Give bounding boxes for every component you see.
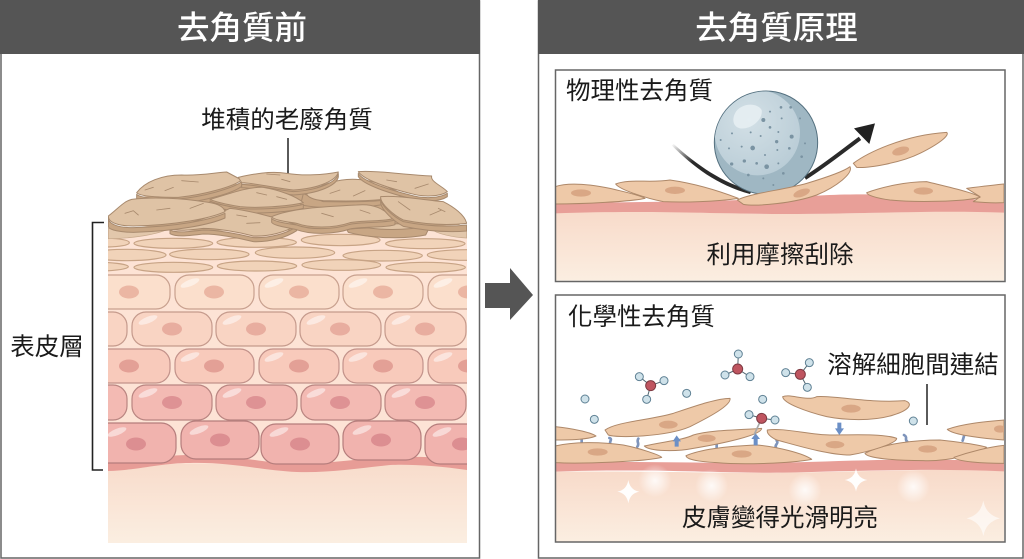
molecule 2: [721, 350, 754, 381]
label: dissolve cell bonds: 溶解細胞間連結: [827, 351, 999, 379]
scrub ball: [714, 90, 818, 194]
heading: physical exfoliation: 物理性去角質: [566, 77, 713, 105]
basement membrane: [555, 194, 1004, 214]
sub-panel: chemical exfoliation: [555, 295, 1006, 542]
molecule 3: [782, 359, 813, 391]
caption: friction removal: 利用摩擦刮除: [706, 241, 854, 269]
molecule 1: [635, 373, 668, 403]
panel: exfoliation principle: [538, 0, 1024, 558]
arrow: before to principle: [485, 268, 533, 320]
arrow: lift off: [805, 123, 875, 178]
cell row 2: [48, 312, 466, 346]
caption: smooth bright skin: 皮膚變得光滑明亮: [682, 504, 878, 532]
label: epidermis: 表皮層: [10, 333, 84, 361]
heading: chemical exfoliation: 化學性去角質: [568, 303, 715, 331]
skin cells: [555, 396, 1006, 464]
skin cells: [555, 132, 1004, 204]
cell row 5: [90, 421, 505, 464]
basement membrane: [555, 459, 1004, 473]
free atoms: [581, 389, 917, 425]
glows and sparkles: [617, 464, 1000, 536]
illustration: skin cross-section: [108, 170, 467, 543]
cell row 1: [90, 275, 508, 309]
blue arrows: [673, 423, 844, 447]
cell row 4: [48, 385, 466, 420]
panel: before exfoliation: [0, 0, 508, 558]
chemical exfoliation illustration: [555, 350, 1006, 542]
label: dead skin buildup: 堆積的老廢角質: [201, 106, 373, 134]
header: exfoliation principle: [538, 0, 1024, 54]
intercellular bonds: [582, 435, 964, 448]
scraped cell: [737, 167, 850, 205]
header: exfoliation principle: 去角質原理: [695, 10, 858, 46]
bracket: epidermis: [92, 222, 104, 470]
basement membrane: [108, 455, 467, 472]
dead skin flakes: [108, 171, 467, 242]
molecule 4: [745, 395, 779, 435]
header: before exfoliation: [0, 0, 480, 54]
cell row 3: [90, 349, 508, 383]
physical exfoliation illustration: [555, 90, 1004, 281]
header: before exfoliation: 去角質前: [177, 10, 307, 46]
dermis: [555, 210, 1004, 281]
flattened upper cells: [108, 234, 467, 273]
dermis: [555, 470, 1004, 542]
sub-panel: physical exfoliation: [555, 70, 1005, 282]
dermis: [108, 464, 467, 543]
leader line: bonds: [926, 384, 928, 425]
motion trail: [672, 144, 752, 194]
leader line: dead skin: [287, 138, 289, 178]
